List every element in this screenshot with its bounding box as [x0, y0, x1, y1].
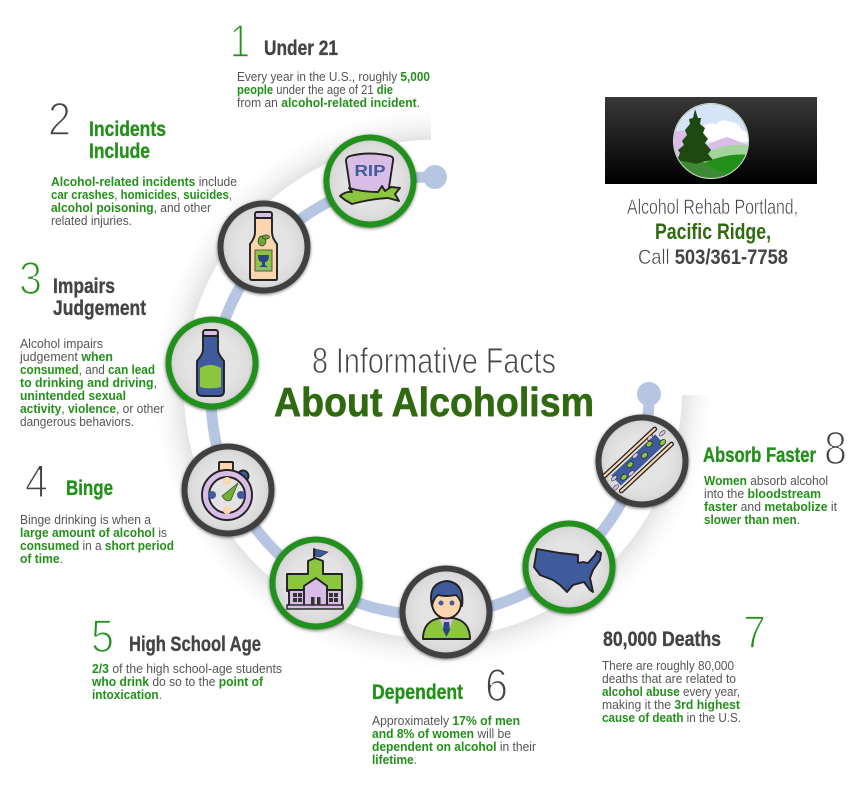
- icon: USA map: [526, 524, 612, 610]
- fact 4: binge: large amount of alcohol is: [20, 525, 167, 540]
- logo caption: [627, 196, 798, 269]
- icon: school building: [272, 540, 360, 626]
- logo caption: Call 503/361-7758: [638, 246, 788, 269]
- fact 2: incidents include: 2: [48, 93, 71, 145]
- fact 7: 80,000 deaths: cause of death in the U.S.: [602, 710, 741, 725]
- fact 4: binge: consumed in a short period: [20, 538, 174, 553]
- fact 5: high school age: 2/3 of the high school-age students: [92, 661, 282, 676]
- fact 8: absorb faster: 8: [824, 422, 847, 474]
- fact 1: under 21: Every year in the U.S., roughly 5,000: [237, 69, 430, 84]
- fact 2: incidents include: Include: [89, 140, 150, 163]
- title: 8 Informative Facts: [312, 340, 556, 381]
- fact 6: dependent: Dependent: [372, 681, 463, 704]
- icon: stopwatch: [184, 446, 272, 534]
- fact 2: incidents include: Incidents: [89, 118, 166, 141]
- fact 1: under 21: [230, 15, 430, 110]
- fact 8: absorb faster: [703, 422, 847, 527]
- fact 4: binge: Binge: [66, 477, 113, 500]
- fact 1: under 21: Under 21: [264, 37, 338, 60]
- fact 3: impairs judgement: dangerous behaviors.: [20, 414, 134, 429]
- fact 3: impairs judgement: Impairs: [53, 275, 115, 298]
- fact 2: incidents include: car crashes, homicides, suicides,: [51, 187, 232, 202]
- fact 3: impairs judgement: 3: [19, 252, 42, 304]
- logo caption: Alcohol Rehab Portland,: [627, 196, 798, 219]
- icon: dark bottle: [168, 320, 256, 406]
- fact 3: impairs judgement: consumed, and can lead: [20, 362, 155, 377]
- fact 5: high school age: intoxication.: [92, 687, 162, 702]
- fact 5: high school age: 5: [91, 610, 114, 662]
- fact 8: absorb faster: into the bloodstream: [704, 486, 821, 501]
- fact 7: 80,000 deaths: deaths that are related to: [602, 671, 736, 686]
- title: About Alcoholism: [274, 379, 594, 425]
- fact 6: dependent: and 8% of women will be: [372, 726, 511, 741]
- fact 5: high school age: [91, 610, 282, 702]
- fact 3: impairs judgement: judgement when: [19, 349, 113, 364]
- fact 7: 80,000 deaths: 80,000 Deaths: [603, 628, 721, 651]
- fact 1: under 21: people under the age of 21 die: [237, 82, 393, 97]
- fact 8: absorb faster: Women absorb alcohol: [704, 473, 828, 488]
- fact 1: under 21: from an alcohol-related incident.: [237, 95, 420, 110]
- fact 3: impairs judgement: unintended sexual: [20, 388, 126, 403]
- icon: logo landscape: [674, 104, 748, 178]
- fact 3: impairs judgement: to drinking and driving,: [20, 375, 157, 390]
- icon: businessman: [402, 568, 490, 656]
- fact 6: dependent: [372, 659, 537, 767]
- fact 4: binge: Binge drinking is when a: [20, 512, 152, 527]
- fact 7: 80,000 deaths: [602, 606, 766, 725]
- fact 6: dependent: Approximately 17% of men: [372, 713, 520, 728]
- fact 4: binge: of time.: [20, 551, 63, 566]
- fact 3: impairs judgement: Judgement: [53, 297, 146, 320]
- icon: gravestone: RIP: [354, 163, 386, 180]
- fact 3: impairs judgement: Alcohol impairs: [20, 336, 103, 351]
- icon: gravestone: [326, 138, 414, 224]
- timeline arc: [211, 165, 661, 615]
- fact 5: high school age: who drink do so to the point of: [91, 674, 264, 689]
- icon: beer bottle: [220, 204, 308, 290]
- fact 5: high school age: High School Age: [129, 633, 261, 656]
- fact 7: 80,000 deaths: There are roughly 80,000: [602, 658, 734, 673]
- fact 1: under 21: 1: [230, 15, 250, 67]
- fact 7: 80,000 deaths: alcohol abuse every year,: [602, 684, 740, 699]
- panel: logo: [605, 97, 817, 184]
- icon: blood vessel: [598, 418, 686, 504]
- fact 4: binge: 4: [25, 455, 48, 507]
- fact 6: dependent: lifetime.: [372, 752, 417, 767]
- fact 7: 80,000 deaths: making it the 3rd highest: [602, 697, 741, 712]
- background crescent shadow: [166, 122, 700, 656]
- fact 2: incidents include: [48, 93, 237, 228]
- title: [274, 340, 594, 425]
- fact 3: impairs judgement: activity, violence, or other: [20, 401, 165, 416]
- fact 2: incidents include: Alcohol-related incidents include: [51, 174, 237, 189]
- fact 2: incidents include: related injuries.: [51, 213, 132, 228]
- fact 4: binge: [20, 455, 174, 566]
- fact 6: dependent: 6: [485, 659, 508, 711]
- fact 8: absorb faster: slower than men.: [704, 512, 800, 527]
- fact 3: impairs judgement: [19, 252, 165, 429]
- fact 7: 80,000 deaths: 7: [743, 606, 766, 658]
- fact 8: absorb faster: Absorb Faster: [703, 444, 816, 467]
- fact 6: dependent: dependent on alcohol in their: [372, 739, 537, 754]
- logo caption: Pacific Ridge,: [655, 219, 771, 244]
- fact 8: absorb faster: faster and metabolize it: [704, 499, 837, 514]
- fact 2: incidents include: alcohol poisoning, and other: [51, 200, 212, 215]
